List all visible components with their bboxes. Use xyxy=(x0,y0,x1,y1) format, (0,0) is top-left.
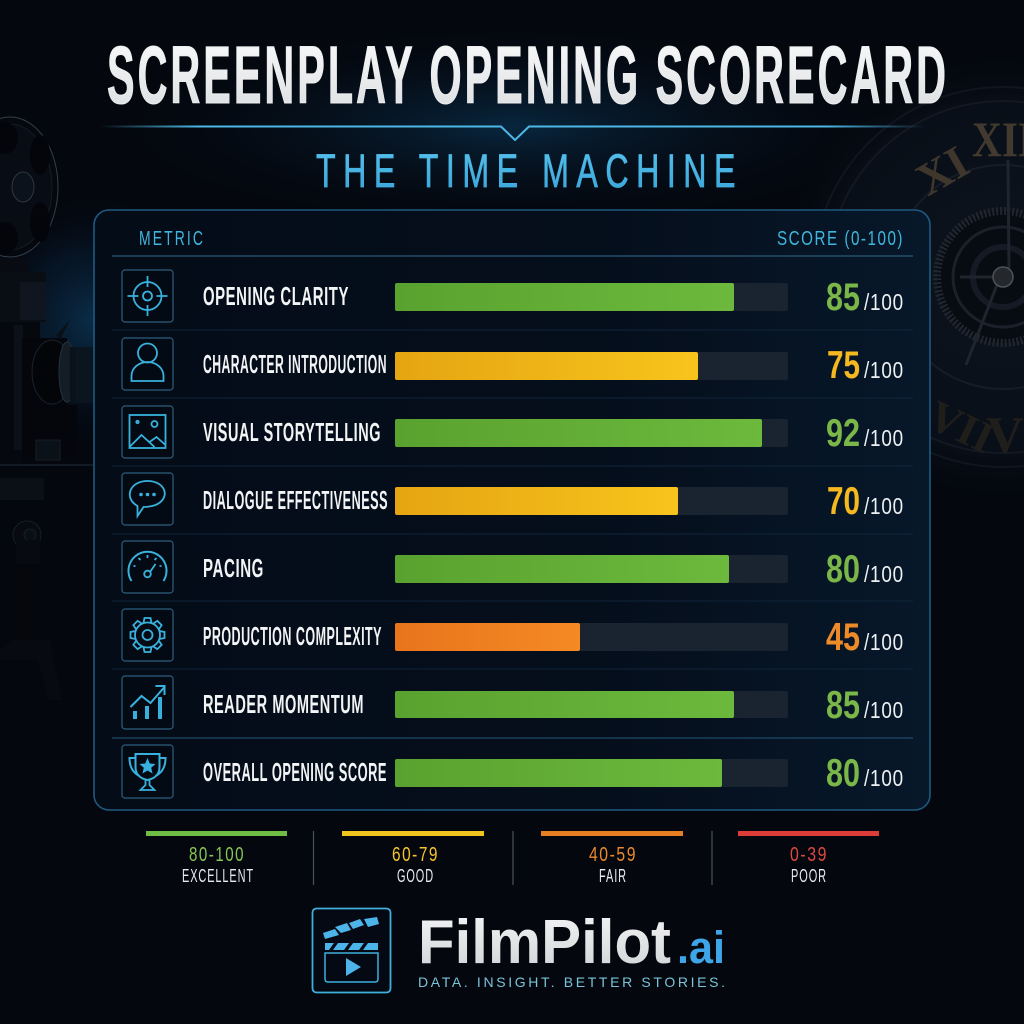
row: overall opening score xyxy=(122,745,904,798)
legend: fair xyxy=(541,831,683,886)
row: character introduction: 75 xyxy=(827,344,860,387)
row: pacing: /100 xyxy=(864,561,904,587)
row: pacing: 80 xyxy=(826,548,860,591)
icon: gauge xyxy=(122,541,173,593)
illustration: antique clock: VII xyxy=(921,391,1001,463)
row: production complexity xyxy=(122,609,904,661)
row: reader momentum xyxy=(122,676,904,729)
legend: fair: FAIR xyxy=(599,866,627,886)
row: production complexity: PRODUCTION COMPLEXITY xyxy=(203,621,382,651)
icon: clapperboard xyxy=(312,908,390,992)
table header: SCORE (0-100) xyxy=(777,228,904,250)
row: pacing: PACING xyxy=(203,553,264,583)
legend: poor: 0-39 xyxy=(790,844,828,866)
icon: image xyxy=(122,406,173,458)
legend: excellent xyxy=(146,831,287,886)
legend: fair: 40-59 xyxy=(589,844,637,866)
legend: poor: POOR xyxy=(791,866,827,886)
table header xyxy=(112,228,913,256)
row: character introduction: CHARACTER INTRODUCTION xyxy=(203,349,387,379)
legend: good: GOOD xyxy=(397,866,434,886)
icon: gear xyxy=(122,609,173,661)
row: visual storytelling: /100 xyxy=(864,425,904,451)
tagline: DATA. INSIGHT. BETTER STORIES. xyxy=(418,974,725,990)
row: overall opening score: /100 xyxy=(864,765,904,791)
icon: trophy xyxy=(122,745,173,798)
table header: METRIC xyxy=(139,228,205,250)
row: production complexity: /100 xyxy=(864,629,904,655)
row: dialogue effectiveness: 70 xyxy=(827,480,860,523)
legend: poor xyxy=(738,831,879,886)
legend: good: 60-79 xyxy=(392,844,439,866)
row: pacing xyxy=(122,541,904,593)
icon: person xyxy=(122,338,173,390)
row: reader momentum: /100 xyxy=(864,697,904,723)
row: visual storytelling: VISUAL STORYTELLING xyxy=(203,417,381,447)
row: reader momentum: READER MOMENTUM xyxy=(203,689,364,719)
row: opening clarity: 85 xyxy=(826,276,860,319)
illustration: film projector xyxy=(0,117,94,700)
subtitle: THE TIME MACHINE xyxy=(316,144,743,197)
row: overall opening score: 80 xyxy=(826,752,860,795)
icon: growth chart xyxy=(122,676,173,729)
row: overall opening score: OVERALL OPENING SCORE xyxy=(203,757,387,787)
illustration: antique clock xyxy=(813,87,1024,467)
illustration: antique clock: XI xyxy=(907,136,977,205)
row: production complexity: 45 xyxy=(826,616,860,659)
icon: speech bubble xyxy=(122,473,173,525)
logo: FilmPilot.ai: .ai xyxy=(677,922,725,973)
row: dialogue effectiveness: /100 xyxy=(864,493,904,519)
row: opening clarity: /100 xyxy=(864,289,904,315)
legend xyxy=(146,831,879,886)
legend: good xyxy=(342,831,484,886)
row: visual storytelling xyxy=(122,406,904,458)
row: reader momentum: 85 xyxy=(826,684,860,727)
row: visual storytelling: 92 xyxy=(826,412,860,455)
panel: scorecard xyxy=(94,210,930,810)
row: dialogue effectiveness: DIALOGUE EFFECTIVENESS xyxy=(203,485,388,515)
row: opening clarity: OPENING CLARITY xyxy=(203,281,349,311)
icon: target xyxy=(122,270,173,322)
title divider with notch xyxy=(100,126,925,140)
row: opening clarity xyxy=(122,270,904,322)
row: character introduction: /100 xyxy=(864,357,904,383)
row: dialogue effectiveness xyxy=(122,473,904,525)
wordmark: FilmPilot xyxy=(418,908,671,977)
row: character introduction xyxy=(122,338,904,390)
legend: excellent: 80-100 xyxy=(189,844,245,866)
logo: FilmPilot.ai xyxy=(312,908,725,992)
legend: excellent: EXCELLENT xyxy=(182,866,254,886)
